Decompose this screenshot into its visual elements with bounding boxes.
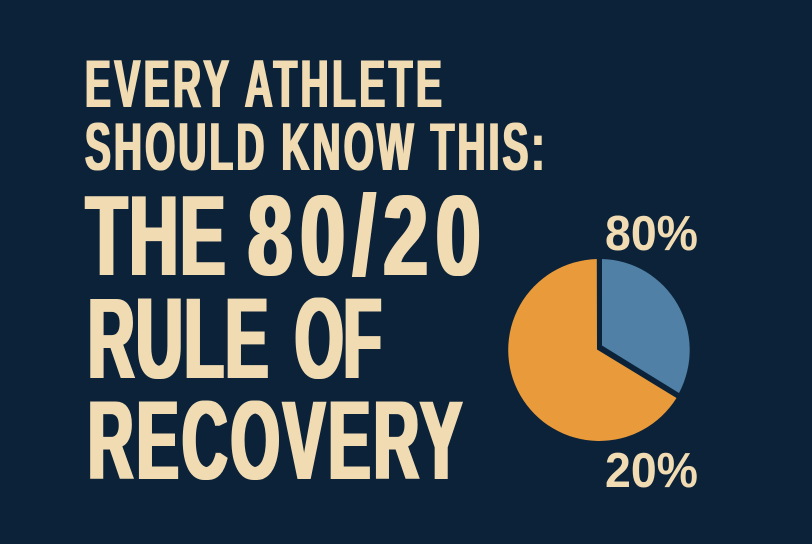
heading: every athlete should know this <box>85 46 544 185</box>
heading: every athlete should know this: SHOULD KNOW THIS: <box>85 109 544 185</box>
title: the 80/20 rule of recovery <box>86 171 480 504</box>
label: 80%: 80% <box>605 207 698 261</box>
title: the 80/20 rule of recovery: RECOVERY <box>88 379 462 504</box>
pie chart <box>508 259 690 441</box>
title: the 80/20 rule of recovery: OF <box>295 273 381 403</box>
pie slice: orange <box>508 259 676 441</box>
label: 20%: 20% <box>605 444 698 498</box>
title: the 80/20 rule of recovery: RULE <box>88 274 268 403</box>
heading: every athlete should know this: EVERY ATHLETE <box>85 46 442 122</box>
title: the 80/20 rule of recovery: 80/20 <box>248 172 480 299</box>
pie slice: blue <box>602 259 690 393</box>
title: the 80/20 rule of recovery: THE <box>86 171 225 299</box>
